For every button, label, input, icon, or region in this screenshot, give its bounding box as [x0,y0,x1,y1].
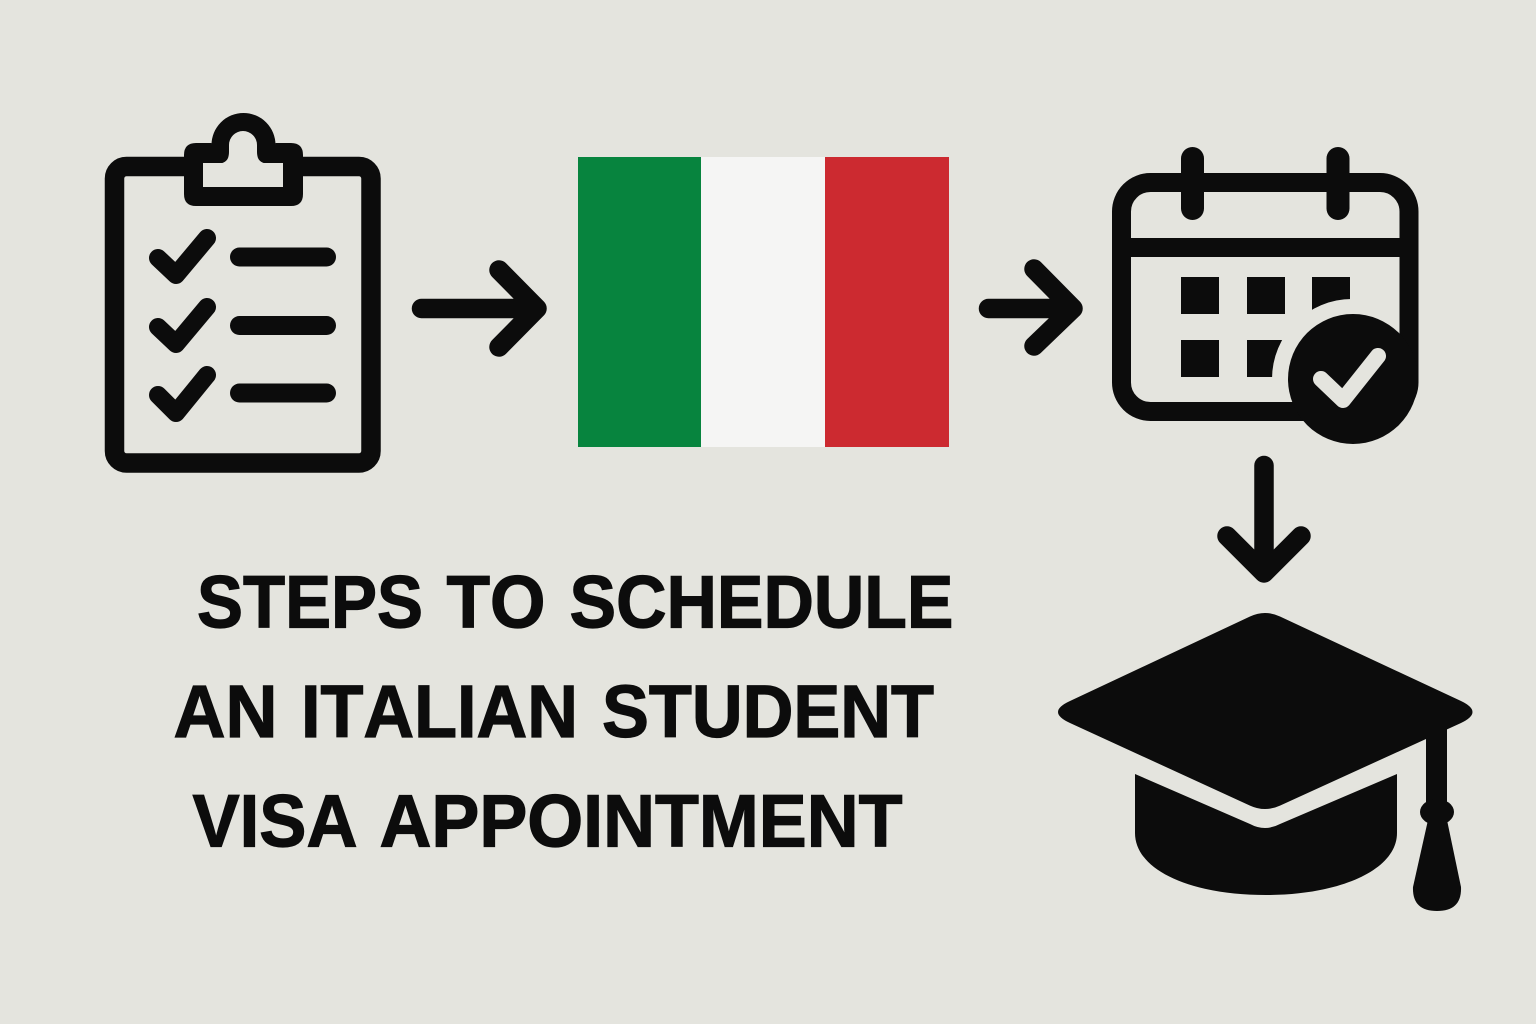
title line 3: VISA [192,780,358,862]
icon: calendar with check [1122,158,1432,459]
icon: clipboard checklist [114,113,371,463]
title line 2: STUDENT [602,670,934,753]
icon: Italian flag [578,157,949,447]
arrow: clipboard to flag [422,270,537,347]
title line 2 [174,670,934,753]
title line 2: ITALIAN [301,670,578,753]
title line 2: AN [174,670,278,753]
title line 1: TO [446,560,546,644]
title line 1 [197,560,954,644]
title [174,560,954,862]
title line 1: SCHEDULE [570,560,954,644]
title line 3: APPOINTMENT [380,780,902,862]
arrow: flag to calendar [988,269,1073,346]
arrow: calendar to graduation cap [1227,466,1301,573]
title line 1: STEPS [197,560,423,644]
icon: graduation cap [1058,613,1472,911]
